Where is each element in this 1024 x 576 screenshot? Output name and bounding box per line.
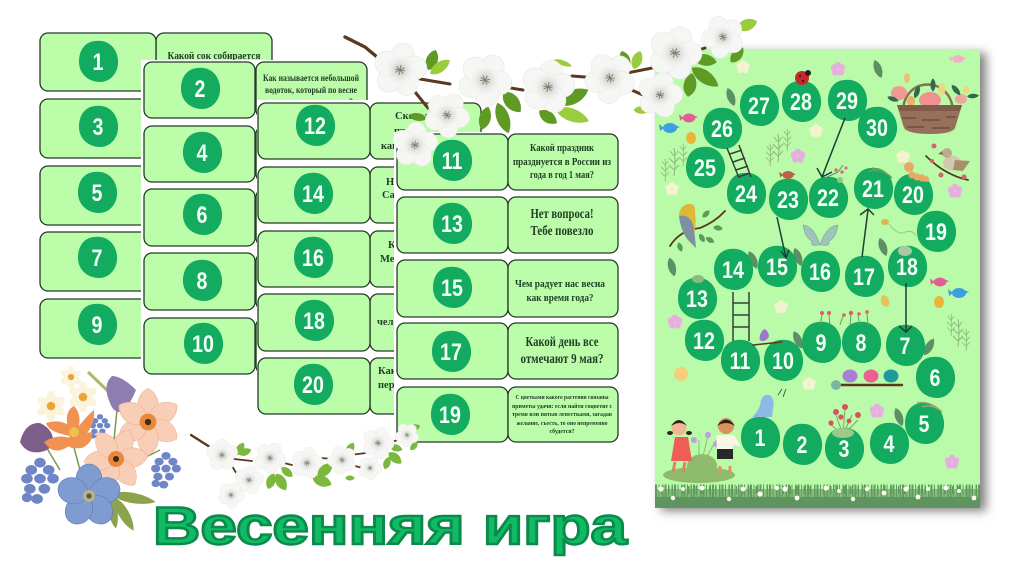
panel: card sheet 2 (even numbers) <box>141 60 371 378</box>
partially hidden question text: Меж <box>380 254 402 265</box>
icon: right muscari <box>151 452 181 489</box>
card number 19 <box>431 394 470 435</box>
question 19: сбудется? <box>550 428 574 435</box>
question 17: Какой день все <box>526 335 598 350</box>
board cell 5 <box>905 403 944 444</box>
card number 16: 16 <box>302 244 324 271</box>
card number 18: 18 <box>303 307 325 334</box>
card number 20: 20 <box>302 371 324 398</box>
board cell 21: 21 <box>862 175 884 202</box>
board cell 20 <box>894 174 933 215</box>
card number 7 <box>78 237 117 278</box>
board cell 10 <box>764 340 803 381</box>
icon: small blue, pink and yellow birds upper left <box>659 114 698 144</box>
icon: butterfly <box>803 225 838 246</box>
question 11: празднуется в России из <box>513 156 611 168</box>
icon: sun <box>674 367 688 381</box>
icon: bee <box>881 219 916 236</box>
partially hidden question text: К <box>388 240 396 251</box>
board cell 5: 5 <box>919 410 929 437</box>
icon: peach flower 2 <box>73 416 159 502</box>
board cell 12: 12 <box>693 327 715 354</box>
board cell 12 <box>685 320 724 361</box>
icon: flower basket <box>887 73 979 134</box>
board cell 27: 27 <box>748 92 770 119</box>
board cell 2 <box>783 424 822 465</box>
icon: small daisy 1 <box>35 391 67 421</box>
board cell 30: 30 <box>866 114 888 141</box>
illustration: upper blossom branch <box>345 5 759 172</box>
panel: card sheet 1 (odd numbers) <box>40 33 272 358</box>
board cell 27 <box>740 85 779 126</box>
board cell 16 <box>801 251 840 292</box>
title: Весенняя игра <box>153 497 628 556</box>
board cell 4: 4 <box>884 430 895 457</box>
card number 1 <box>79 41 118 82</box>
decoration: small pink and cream flowers <box>665 60 962 469</box>
board cell 26 <box>703 108 742 149</box>
decoration: grass sprigs <box>661 129 970 351</box>
board cell 17 <box>845 256 884 297</box>
question text 2: Как называется небольшой <box>263 73 359 84</box>
card number 12 <box>296 105 335 146</box>
board cell 19: 19 <box>925 218 947 245</box>
board cell 24 <box>727 173 766 214</box>
card number 4 <box>183 132 222 173</box>
board cell 13 <box>678 278 717 319</box>
board cell 28: 28 <box>790 88 812 115</box>
icon: mauve tulip <box>20 423 53 452</box>
board cell 17: 17 <box>853 263 875 290</box>
partially hidden question text: Сав <box>382 190 401 201</box>
board cell 13: 13 <box>686 285 708 312</box>
board cell 8 <box>842 322 881 363</box>
card number 13: 13 <box>441 210 463 237</box>
partially hidden question text: чело <box>377 317 399 328</box>
question 13 <box>530 207 594 239</box>
illustration: flower bouquet <box>20 366 182 533</box>
board cell 14: 14 <box>722 256 745 283</box>
panel: card sheet 3 (even numbers 12-20) <box>257 100 481 418</box>
board cell 1: 1 <box>755 424 765 451</box>
card number 9: 9 <box>92 311 102 338</box>
question 13: Нет вопроса! <box>530 207 594 222</box>
question 19: С цветками какого растения связаны <box>516 394 608 401</box>
card number 12: 12 <box>304 112 326 139</box>
board cell 29 <box>828 80 867 121</box>
card number 17: 17 <box>440 338 462 365</box>
partially hidden question text: пер <box>378 380 395 391</box>
partially hidden question text: На <box>386 177 400 188</box>
question 19: желание, съесть, то оно непременно <box>516 420 608 427</box>
icon: flower sprig on cell 22 <box>825 165 848 183</box>
icon: small birds right side <box>930 278 969 308</box>
decoration: grass strip with flowers <box>655 485 980 508</box>
question 15 <box>515 278 605 304</box>
card number 14: 14 <box>302 180 325 207</box>
icon: yellow bird on branch <box>670 204 725 252</box>
board cell 22 <box>809 177 848 218</box>
card number 14 <box>294 173 333 214</box>
question 11: года в год 1 мая? <box>530 169 594 181</box>
card number 9 <box>78 304 117 345</box>
question 13: Тебе повезло <box>530 224 594 239</box>
board cell 11: 11 <box>730 347 750 374</box>
icon: left muscari <box>21 458 59 504</box>
board cell 21 <box>854 168 893 209</box>
board cell 2: 2 <box>797 431 807 458</box>
ladder from 11 to 14 <box>733 292 749 341</box>
board cell 7: 7 <box>900 332 910 359</box>
card number 11: 11 <box>442 147 462 174</box>
question text 2: водоток, который по весне <box>265 85 357 96</box>
question 19: тремя или пятью лепестками, загадав <box>512 411 612 418</box>
board cell 15: 15 <box>766 253 788 280</box>
icon: small daisy 3 <box>60 366 82 388</box>
card number 7: 7 <box>92 244 102 271</box>
card number 11 <box>433 140 472 181</box>
arrow from 23 to 15 <box>777 217 789 258</box>
decoration: dark leaves <box>666 59 937 427</box>
icon: ladybird <box>795 70 811 85</box>
partially hidden question text: пт <box>394 126 406 137</box>
board cell 6: 6 <box>930 364 940 391</box>
card number 3: 3 <box>93 113 103 140</box>
card number 4: 4 <box>197 139 208 166</box>
icon: nest on cell 5 <box>917 402 942 412</box>
board cell 23 <box>769 179 808 220</box>
board cell 14 <box>714 249 753 290</box>
card number 15 <box>433 267 472 308</box>
icon: caterpillar <box>904 162 929 182</box>
icon: flowers above cells 8 and 9 <box>820 310 869 325</box>
board cell 7 <box>886 325 925 366</box>
partially hidden question text: как <box>381 141 399 152</box>
board cell 4 <box>870 423 909 464</box>
question 15: Чем радует нас весна <box>515 278 605 290</box>
board cell 25 <box>686 147 725 188</box>
card number 8: 8 <box>197 267 207 294</box>
card number 5 <box>78 172 117 213</box>
arrow from 17 to 21 <box>860 209 874 257</box>
partially hidden question text <box>377 111 432 391</box>
icon: flowers on cell 3 <box>828 404 861 438</box>
question 17: отмечают 9 мая? <box>520 352 604 367</box>
board cell 23: 23 <box>777 186 799 213</box>
board cell 10: 10 <box>772 347 794 374</box>
icon: bee at cell 7 <box>879 294 891 308</box>
board cell 18 <box>888 246 927 287</box>
card number 18 <box>295 300 334 341</box>
panel: game board <box>655 50 980 508</box>
card number 2 <box>181 68 220 109</box>
card number 8 <box>183 260 222 301</box>
icon: frog on cell 13 <box>692 275 704 283</box>
board cell 19 <box>917 211 956 252</box>
board cell 22: 22 <box>817 184 839 211</box>
board cell 29: 29 <box>836 87 858 114</box>
board cell 6 <box>916 357 955 398</box>
question 17 <box>520 335 604 367</box>
card number 6 <box>183 194 222 235</box>
icon: blue anemone <box>55 464 123 530</box>
card number 3 <box>79 106 118 147</box>
card number 2: 2 <box>195 75 205 102</box>
card number 13 <box>433 203 472 244</box>
question 19 <box>512 394 612 435</box>
illustration: lower blossom branch <box>191 417 425 515</box>
question text 2 <box>263 73 359 108</box>
card number 10: 10 <box>192 330 214 357</box>
icon: small bird on cell 23 <box>779 171 796 179</box>
board cell 16: 16 <box>809 258 831 285</box>
card number 19: 19 <box>439 401 461 428</box>
icon: small daisy 2 <box>67 382 99 412</box>
card number 10 <box>184 323 223 364</box>
board cell 30 <box>858 107 897 148</box>
board cell 18: 18 <box>896 253 918 280</box>
question 11 <box>513 142 611 181</box>
partially hidden question text: Како <box>378 366 402 377</box>
icon: flower sprig on cell 21 <box>868 168 892 178</box>
icon: frog on cell 18 <box>898 246 912 256</box>
board cell 20: 20 <box>902 181 924 208</box>
panel: card sheet 4 (odd numbers 11-19 with questions) <box>394 132 622 446</box>
icon: pink bird top right <box>949 55 966 63</box>
card number 15: 15 <box>441 274 463 301</box>
board cell 9 <box>802 322 841 363</box>
question text 2: из-за таяния журчит? <box>269 98 353 108</box>
partially hidden question text: Скольк <box>395 111 432 122</box>
icon: sparrow on branch <box>926 144 970 180</box>
card number 6: 6 <box>197 201 207 228</box>
board cell 9: 9 <box>816 329 826 356</box>
board cell 24: 24 <box>735 180 758 207</box>
icon: purple tulip <box>106 376 136 412</box>
arrow from 18 to 7 <box>899 283 912 332</box>
question 19: приметы удачи: если найти соцветие с <box>512 403 612 410</box>
card number 5: 5 <box>92 179 102 206</box>
card number 20 <box>294 364 333 405</box>
question 15: как время года? <box>526 292 594 304</box>
icon: small blue muscari <box>90 414 110 440</box>
board cell 11 <box>721 340 760 381</box>
board cell 26: 26 <box>711 115 733 142</box>
board cell 28 <box>782 81 821 122</box>
card number 16 <box>294 237 333 278</box>
illustration: children with flowers <box>663 418 741 483</box>
icon: peach flower 1 <box>114 388 182 456</box>
panel: card sheet 1 (odd numbers): Какой сок собирается <box>168 50 261 62</box>
board cell 1 <box>741 417 780 458</box>
card number 1: 1 <box>93 48 103 75</box>
question 11: Какой праздник <box>530 142 595 154</box>
ladder from 24 to 26 <box>727 145 751 178</box>
board cell 15 <box>758 246 797 287</box>
board cell 3 <box>825 428 864 469</box>
icon: blue bird on cell 1 <box>752 395 774 417</box>
arrow from 29 to 22 <box>817 118 845 177</box>
board cell 25: 25 <box>694 154 716 181</box>
icon: orange flower <box>44 406 94 451</box>
icon: music notes <box>778 389 786 397</box>
board cell 8: 8 <box>856 329 866 356</box>
icon: purple bird on branch <box>753 329 782 345</box>
board cell 3: 3 <box>839 435 849 462</box>
icon: three birds on branch <box>831 370 902 390</box>
card number 17 <box>432 331 471 372</box>
